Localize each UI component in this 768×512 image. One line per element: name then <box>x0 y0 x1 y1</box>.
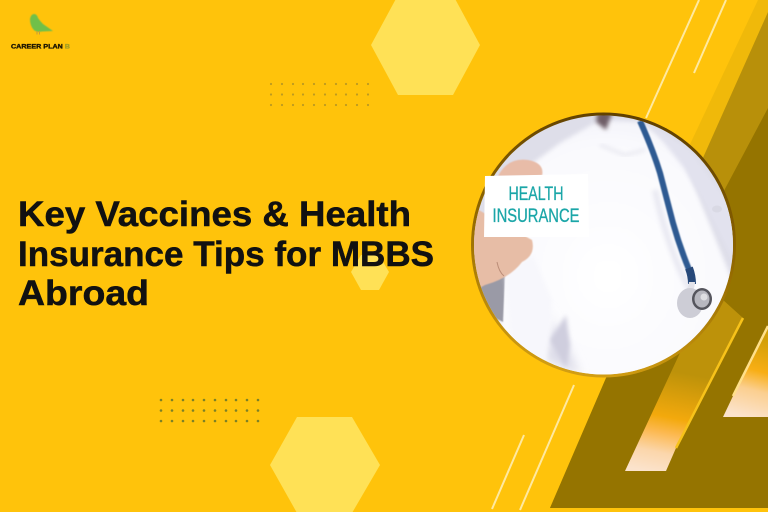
photo contents <box>474 116 733 374</box>
health insurance card <box>484 174 589 237</box>
dot grid: top <box>270 83 369 106</box>
accent stripes <box>492 0 768 510</box>
hexagon: bottom <box>270 417 380 512</box>
title: Abroad <box>18 274 149 313</box>
hexagon: top <box>371 0 480 95</box>
stethoscope <box>640 121 690 272</box>
photo ring <box>471 112 736 378</box>
title: Insurance Tips for MBBS <box>18 235 434 274</box>
title: Key Vaccines & Health <box>18 195 411 234</box>
photo circle: doctor holding health insurance card <box>470 108 745 380</box>
hexagon: small behind title <box>351 255 389 290</box>
icon: green bird <box>30 14 53 34</box>
logo <box>11 14 70 50</box>
health insurance card: HEALTH <box>508 184 564 205</box>
dot grid: bottom <box>160 399 259 422</box>
decorative diagonal bands: top right to bottom <box>550 0 768 508</box>
health insurance card: INSURANCE <box>492 206 580 227</box>
logo wordmark: CAREER PLAN B <box>11 44 70 50</box>
title <box>18 195 434 313</box>
